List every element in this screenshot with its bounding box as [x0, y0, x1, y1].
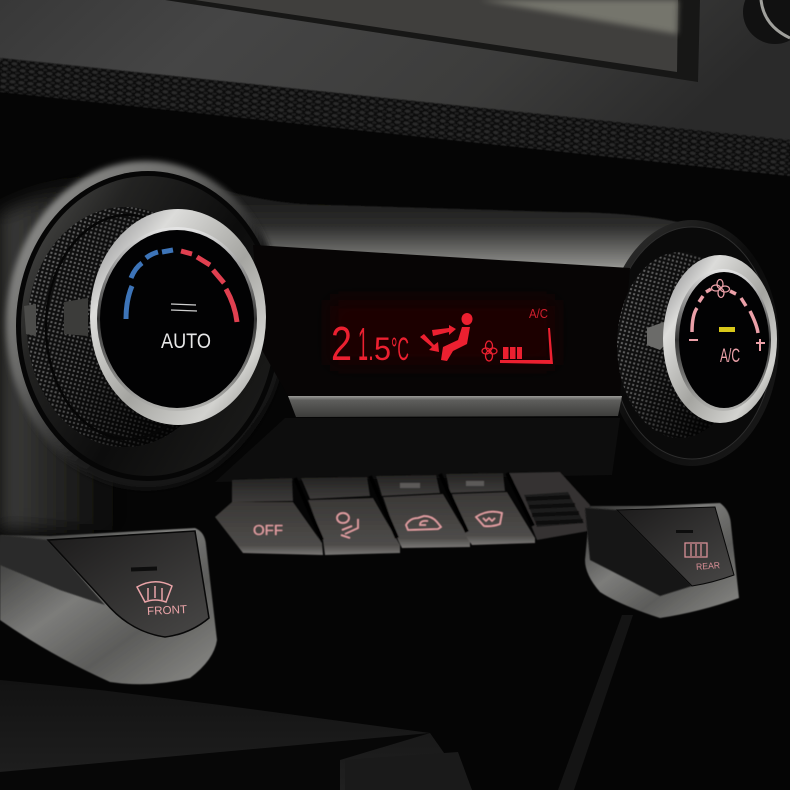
temperature reading: °C	[391, 331, 409, 367]
set point mark	[171, 304, 197, 311]
rear demist paddle	[585, 503, 739, 618]
chrome ring	[663, 255, 777, 423]
display A/C label: A/C	[529, 306, 548, 321]
button dividers	[295, 473, 533, 540]
corner knob	[743, 0, 790, 44]
AUTO label: AUTO	[161, 330, 211, 353]
A/C label: A/C	[720, 346, 740, 367]
knurled grip	[617, 252, 743, 438]
temperature scale	[126, 250, 237, 322]
button: off	[215, 478, 323, 555]
REAR label: REAR	[696, 560, 721, 572]
grip notch	[647, 322, 664, 350]
button: seat air	[301, 477, 400, 555]
button row	[215, 472, 594, 555]
button: vent	[507, 472, 594, 540]
unit body left side	[0, 178, 130, 530]
rear demist icon	[685, 543, 707, 557]
plus sign	[756, 339, 765, 351]
knurled grip	[27, 207, 223, 447]
button: windscreen	[446, 473, 535, 545]
front demist paddle	[0, 528, 217, 684]
left bezel	[6, 161, 286, 489]
left knob	[24, 207, 266, 447]
leather strip	[0, 58, 790, 176]
black face	[679, 272, 769, 408]
minus sign	[689, 339, 698, 341]
button: off: OFF	[253, 522, 283, 539]
fan speed scale	[692, 289, 758, 333]
yellow indicator	[719, 327, 735, 332]
central panel band	[175, 172, 690, 280]
black face	[100, 230, 254, 408]
gear lever rod	[558, 615, 633, 790]
fan level bars	[500, 328, 553, 364]
windscreen demist icon	[137, 582, 172, 602]
temperature reading: 2	[331, 318, 352, 371]
FRONT label: FRONT	[147, 604, 187, 618]
temperature reading	[331, 318, 409, 371]
fan icon	[482, 341, 497, 361]
right knob	[617, 252, 777, 438]
grip notch	[24, 304, 36, 336]
right bezel	[605, 220, 779, 466]
button: recirculation	[376, 475, 470, 548]
fan icon	[712, 280, 730, 298]
temperature reading: 1	[358, 318, 368, 370]
digital display	[253, 245, 630, 396]
chrome ring	[90, 209, 266, 425]
silver strip below display	[288, 396, 622, 417]
seat airflow icon	[420, 313, 472, 361]
temperature reading: 5	[374, 331, 391, 367]
temperature reading: .	[368, 331, 374, 367]
lower panel shadow	[215, 418, 620, 482]
lower console	[0, 680, 472, 790]
infotainment screen	[165, 0, 700, 82]
upper dashboard panel	[0, 0, 790, 145]
